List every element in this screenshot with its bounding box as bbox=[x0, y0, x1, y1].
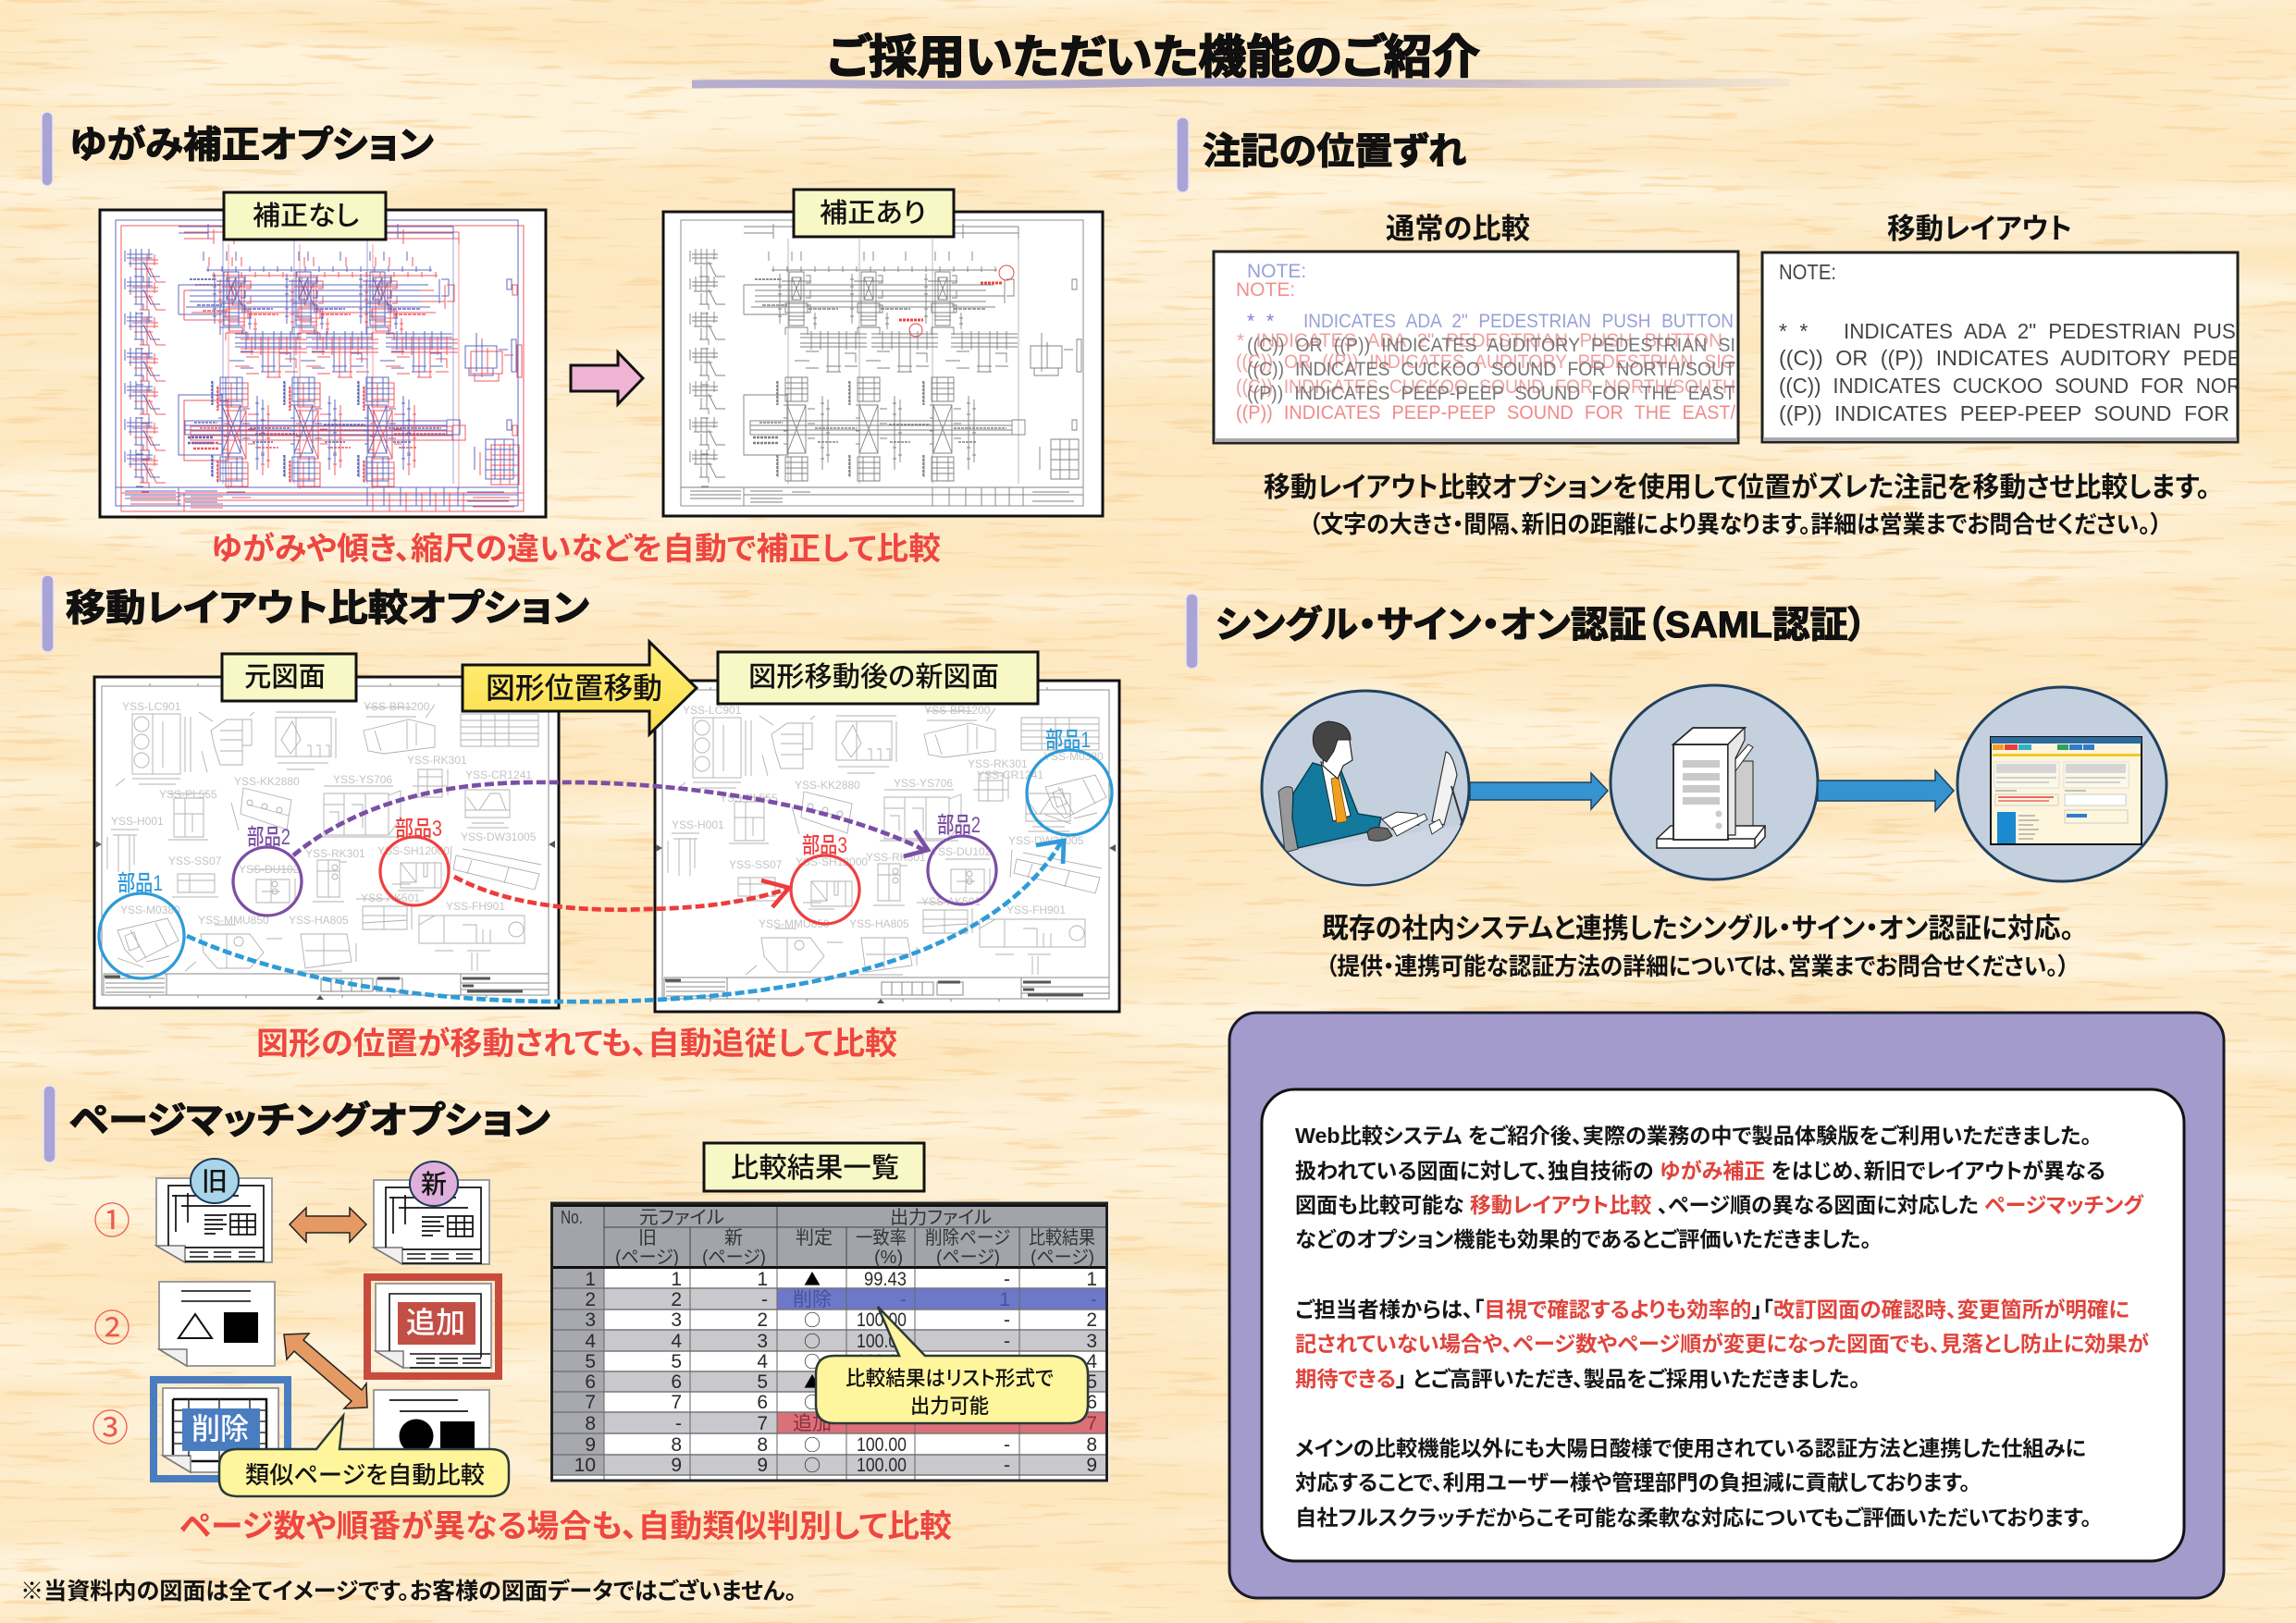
panel: moved layout notes: NOTE: bbox=[1779, 260, 1836, 284]
drawing: original: YSS-MMU850 bbox=[198, 914, 269, 927]
heading: distortion correction bbox=[42, 112, 434, 186]
drawing: original: YSS-SH12000 bbox=[377, 844, 450, 857]
arrow: part 1 movement bbox=[187, 841, 1064, 1002]
drawing: moved: YSS-H001 bbox=[672, 818, 724, 831]
drawing: moved: YSS-FH901 bbox=[1006, 904, 1066, 916]
icon: added page: 追加 bbox=[406, 1306, 465, 1339]
table rows: - bbox=[1091, 1289, 1097, 1310]
drawing: original bbox=[94, 677, 559, 1008]
drawing: original: YSS-BR1200 bbox=[364, 700, 430, 713]
table rows: 5 bbox=[757, 1371, 768, 1393]
heading: annotation offset: 注記の位置ずれ bbox=[1203, 131, 1466, 172]
icon: user at computer bbox=[1262, 691, 1469, 888]
drawing: original: YSS-DU102 bbox=[239, 863, 300, 876]
table rows: 4 bbox=[1086, 1351, 1097, 1372]
callout: list output: 比較結果はリスト形式で bbox=[846, 1367, 1054, 1390]
drawing: moved: YSS-DW31005 bbox=[1008, 834, 1084, 847]
drawing: moved: YSS-KK2880 bbox=[795, 779, 860, 792]
section: annotation offset bbox=[1177, 117, 2251, 538]
table rows: 1 bbox=[999, 1289, 1010, 1310]
table header: 新 bbox=[724, 1227, 743, 1248]
panel: normal comparison notes: ((P)) INDICATES PEEP-PEEP SOUND FOR THE EAST/ bbox=[1236, 402, 1735, 424]
drawing: original: YSS-HA805 bbox=[289, 914, 349, 927]
table rows: - bbox=[1004, 1309, 1010, 1331]
part 3 circles and labels: 部品3 bbox=[395, 817, 442, 842]
text: sso description: 既存の社内システムと連携したシングル・サイン・オン認証に対応。 bbox=[1322, 914, 2074, 944]
drawing: original: YSS-RK301 bbox=[305, 847, 365, 860]
table rows: 6 bbox=[585, 1371, 596, 1393]
table rows: 100.00 bbox=[857, 1351, 907, 1372]
table header: (%) bbox=[874, 1248, 903, 1268]
panel: moved layout notes: ((C)) INDICATES CUCKOO SOUND FOR NOR bbox=[1779, 374, 2241, 398]
table rows: 6 bbox=[671, 1371, 682, 1393]
label: original drawing: 元図面 bbox=[244, 662, 326, 693]
table rows: 3 bbox=[1086, 1331, 1097, 1352]
icon: new page bbox=[374, 1162, 489, 1264]
panel: moved layout notes: ((P)) INDICATES PEEP-PEEP SOUND FOR bbox=[1779, 401, 2229, 425]
panel: normal comparison notes bbox=[1214, 252, 1738, 443]
table rows: 7 bbox=[585, 1392, 596, 1413]
icon: new page: 新 bbox=[421, 1170, 447, 1199]
icon: similar page bbox=[374, 1390, 489, 1457]
table rows: 100.00 bbox=[857, 1455, 907, 1476]
table rows: - bbox=[1004, 1434, 1010, 1456]
table header: 出力ファイル bbox=[890, 1207, 992, 1228]
title: ご採用いただいた機能のご紹介 bbox=[827, 31, 1480, 83]
arrow: similar pages matched bbox=[284, 1334, 367, 1408]
table rows: - bbox=[761, 1289, 768, 1310]
panel: comment text box: などのオプション機能も効果的であるとご評価いただきました。 bbox=[1295, 1227, 1871, 1251]
label: without correction: 補正なし bbox=[253, 201, 359, 231]
panel: moved layout notes: INDICATES ADA 2" PEDESTRIAN PUSH bbox=[1844, 319, 2251, 343]
table rows: - bbox=[1004, 1331, 1010, 1352]
drawing: moved: YSS-M0380 bbox=[1043, 750, 1104, 763]
drawing: original: YSS-AK501 bbox=[361, 891, 420, 904]
table header: 比較結果 bbox=[1029, 1227, 1095, 1248]
table rows: 3 bbox=[585, 1309, 596, 1331]
icon: system screen bbox=[1957, 687, 2166, 881]
label: comparison result list: 比較結果一覧 bbox=[731, 1153, 899, 1184]
panel: normal comparison notes: INDICATES ADA 2" PEDESTRIAN PUSH BUTTON bbox=[1303, 311, 1734, 332]
panel: moved layout notes: * * bbox=[1779, 319, 1808, 343]
drawing: moved bbox=[655, 681, 1119, 1012]
drawing: moved: YSS-LC901 bbox=[683, 704, 742, 717]
table header: (ページ) bbox=[615, 1248, 679, 1268]
panel: normal comparison notes: ((C)) OR ((P)) INDICATES AUDITORY PEDESTRIAN SI bbox=[1247, 335, 1735, 356]
drawing: original: YSS-RK301 bbox=[407, 754, 467, 767]
table rows: 100.00 bbox=[857, 1331, 907, 1352]
table rows: 9 bbox=[585, 1434, 596, 1456]
table header: (ページ) bbox=[936, 1248, 1000, 1268]
table rows: 1 bbox=[757, 1269, 768, 1290]
drawing: moved: YSS-MMU850 bbox=[759, 917, 830, 930]
drawing: original: YSS-H001 bbox=[111, 815, 164, 828]
drawing: moved: YSS-HA805 bbox=[849, 917, 909, 930]
table rows: 4 bbox=[757, 1351, 768, 1372]
table rows: 100.00 bbox=[857, 1434, 907, 1456]
footnote: ※当資料内の図面は全てイメージです。お客様の図面データではございません。 bbox=[20, 1578, 796, 1605]
table rows: ○ bbox=[804, 1329, 821, 1353]
table rows: 7 bbox=[1086, 1413, 1097, 1434]
table rows: 2 bbox=[585, 1289, 596, 1310]
icon: authentication server bbox=[1611, 685, 1818, 879]
callout: similar page auto comparison: 類似ページを自動比較 bbox=[245, 1461, 485, 1489]
table rows: ○ bbox=[804, 1432, 821, 1457]
panel: comment text box: Web比較システム をご紹介後、実際の業務の中で製品体験版をご利用いただきました。 bbox=[1295, 1124, 2092, 1148]
table header: 旧 bbox=[638, 1228, 657, 1248]
label: without correction bbox=[224, 192, 386, 240]
heading: page matching bbox=[43, 1086, 550, 1162]
table header: 元ファイル bbox=[639, 1208, 724, 1228]
callout: list output bbox=[816, 1307, 1088, 1423]
table rows: 5 bbox=[671, 1351, 682, 1372]
heading: annotation offset bbox=[1177, 117, 1466, 192]
part 2 circles and labels bbox=[233, 813, 996, 916]
table rows: 1 bbox=[671, 1269, 682, 1290]
step numbers: ③ bbox=[92, 1408, 129, 1449]
drawing: original: YSS-M0380 bbox=[120, 904, 180, 916]
table rows: 8 bbox=[757, 1434, 768, 1456]
panel: comment text box: ご担当者様からは、「目視で確認するよりも効率的」「改訂図面の確認時、変更箇所が明確に bbox=[1295, 1297, 2129, 1322]
drawing: original: YSS-LC901 bbox=[122, 700, 181, 713]
table rows: - bbox=[900, 1289, 907, 1310]
section: page matching bbox=[43, 1086, 1109, 1544]
arrow: part 2 movement bbox=[293, 782, 928, 856]
heading: moved layout: 移動レイアウト比較オプション bbox=[66, 588, 589, 629]
part 1 circles and labels: 部品1 bbox=[117, 871, 163, 896]
icon: page with shapes bbox=[159, 1282, 275, 1366]
drawing: original: YSS-CR1241 bbox=[465, 768, 532, 781]
panel: comment text box bbox=[1262, 1089, 2184, 1561]
panel: normal comparison notes: * INDICATES ADA 2" PEDESTRIAN PUSH BUTTON bbox=[1237, 330, 1722, 351]
table rows: ○ bbox=[804, 1390, 821, 1414]
panel: comment text box: 図面も比較可能な 移動レイアウト比較 、ページ順の異なる図面に対応した ページマッチング bbox=[1295, 1193, 2144, 1217]
table header: No. bbox=[561, 1208, 583, 1228]
arrow: old and new pages match bbox=[290, 1208, 366, 1242]
part 3 circles and labels: 部品3 bbox=[802, 833, 847, 858]
table rows: - bbox=[1004, 1351, 1010, 1372]
label: with correction bbox=[794, 190, 954, 237]
table rows: 9 bbox=[1086, 1455, 1097, 1476]
label: with correction: 補正あり bbox=[820, 198, 926, 228]
drawing: moved: YSS-PL555 bbox=[720, 792, 778, 805]
panel: moved layout notes bbox=[1762, 252, 2251, 442]
part 2 circles and labels: 部品2 bbox=[247, 825, 290, 850]
table header bbox=[551, 1203, 1106, 1269]
table rows bbox=[552, 1267, 1105, 1480]
drawing: moved: YSS-RK301 bbox=[866, 851, 926, 864]
table header: 判定 bbox=[796, 1227, 833, 1248]
panel: customer comments bbox=[1229, 1013, 2224, 1598]
table header: 削除ページ bbox=[925, 1227, 1010, 1248]
drawing: original: YSS-SS07 bbox=[168, 855, 222, 867]
text: annotation description: （文字の大きさ・間隔、新旧の距離により異なります。詳細は営業までお問合せください。） bbox=[1309, 510, 2162, 538]
table rows: 3 bbox=[671, 1309, 682, 1331]
caption: moved layout: 図形の位置が移動されても、自動追従して比較 bbox=[256, 1026, 897, 1062]
table rows: ▲ bbox=[804, 1370, 821, 1394]
drawing: original: YSS-FH901 bbox=[446, 900, 505, 913]
label: new drawing: 図形移動後の新図面 bbox=[748, 662, 999, 693]
icon: old page bbox=[156, 1159, 272, 1262]
table header: (ページ) bbox=[702, 1248, 766, 1268]
table rows: - bbox=[675, 1413, 682, 1434]
panel: normal comparison notes: ((C)) INDICATES CUCKOO SOUND FOR NORTH/SOUTH bbox=[1236, 376, 1735, 398]
drawing: moved: YSS-AK501 bbox=[921, 895, 981, 908]
panel: normal comparison notes: ((C)) OR ((P)) INDICATES AUDITORY PEDESTRIAN SIG bbox=[1236, 351, 1735, 373]
panel: normal comparison notes: NOTE: bbox=[1247, 261, 1306, 282]
panel: comment text box: 対応することで、利用ユーザー様や管理部門の負担減に貢献しております。 bbox=[1295, 1470, 1970, 1494]
table rows: ○ bbox=[804, 1349, 821, 1373]
table rows: 2 bbox=[1086, 1309, 1097, 1331]
drawing: without correction bbox=[100, 210, 546, 517]
drawing: moved: YSS-YS706 bbox=[894, 777, 953, 790]
table rows: ○ bbox=[804, 1308, 821, 1332]
table rows: 99.43 bbox=[864, 1269, 907, 1290]
drawing: original: YSS-YS706 bbox=[333, 773, 392, 786]
label: moved layout: 移動レイアウト bbox=[1887, 213, 2072, 245]
panel: comment text box: 自社フルスクラッチだからこそ可能な柔軟な対応についてもご評価いただいております。 bbox=[1295, 1506, 2092, 1530]
panel: normal comparison notes: ((P)) INDICATES PEEP-PEEP SOUND FOR THE EAST bbox=[1247, 383, 1735, 404]
text: sso description: （提供・連携可能な認証方法の詳細については、営業までお問合せください。） bbox=[1326, 953, 2069, 980]
label: normal comparison: 通常の比較 bbox=[1386, 213, 1530, 245]
panel: moved layout notes: ((C)) OR ((P)) INDICATES AUDITORY PEDE bbox=[1779, 346, 2241, 370]
panel: comment text box: メインの比較機能以外にも大陽日酸様で使用されている認証方法と連携した仕組みに bbox=[1295, 1436, 2086, 1460]
table rows: 1 bbox=[585, 1269, 596, 1290]
part 1 circles and labels: 部品1 bbox=[1045, 728, 1091, 753]
table rows: 1 bbox=[1086, 1269, 1097, 1290]
arrow: part 3 movement bbox=[454, 877, 789, 910]
arrow: correction result bbox=[571, 352, 643, 404]
drawing: with correction bbox=[663, 212, 1103, 516]
table rows: - bbox=[1004, 1269, 1010, 1290]
table rows: 6 bbox=[1086, 1392, 1097, 1413]
step numbers bbox=[92, 1201, 130, 1449]
section: single sign-on bbox=[1186, 594, 2166, 980]
panel: comment text box: 記されていない場合や、ページ数やページ順が変更になった図面でも、見落とし防止に効果が bbox=[1295, 1332, 2149, 1356]
callout: list output: 出力可能 bbox=[910, 1395, 989, 1418]
step numbers: ① bbox=[93, 1201, 130, 1242]
table rows: 追加 bbox=[793, 1413, 832, 1434]
table rows: 9 bbox=[671, 1455, 682, 1476]
icon: deleted page bbox=[154, 1380, 288, 1479]
table rows: 8 bbox=[585, 1413, 596, 1434]
drawing: moved: YSS-CR1241 bbox=[977, 768, 1043, 781]
table rows: 4 bbox=[585, 1331, 596, 1352]
heading: moved layout bbox=[42, 575, 589, 652]
heading: single sign-on: シングル・サイン・オン認証（SAML認証） bbox=[1216, 605, 1867, 646]
table rows: 5 bbox=[585, 1351, 596, 1372]
table rows: 削除 bbox=[793, 1289, 832, 1310]
table rows: ▲ bbox=[804, 1267, 821, 1291]
heading: distortion correction: ゆがみ補正オプション bbox=[69, 125, 434, 166]
text: sso description bbox=[1322, 914, 2074, 980]
table rows: 100.00 bbox=[857, 1309, 907, 1331]
text: annotation description bbox=[1264, 472, 2210, 538]
panel: normal comparison notes: ((C)) INDICATES CUCKOO SOUND FOR NORTH/SOUT bbox=[1247, 359, 1735, 380]
step numbers: ② bbox=[93, 1309, 130, 1349]
table rows: 3 bbox=[757, 1331, 768, 1352]
table rows: 6 bbox=[757, 1392, 768, 1413]
table rows: 4 bbox=[671, 1331, 682, 1352]
icon: old page: 旧 bbox=[202, 1167, 228, 1196]
table rows: 7 bbox=[757, 1413, 768, 1434]
drawing: moved: YSS-DU102 bbox=[931, 845, 992, 858]
caption: page matching: ページ数や順番が異なる場合も、自動類似判別して比較 bbox=[179, 1508, 952, 1544]
panel: comment text box: 扱われている図面に対して、独自技術の ゆがみ補正 をはじめ、新旧でレイアウトが異なる bbox=[1295, 1159, 2105, 1183]
panel: comment text box: 期待できる」 とご高評いただき、製品をご採用いただきました。 bbox=[1295, 1367, 1860, 1391]
icon: deleted page: 削除 bbox=[191, 1412, 249, 1445]
table rows: 8 bbox=[671, 1434, 682, 1456]
drawing: original: YSS-KK2880 bbox=[234, 775, 300, 788]
drawing: original: YSS-DW31005 bbox=[461, 830, 537, 843]
table rows: 2 bbox=[671, 1289, 682, 1310]
heading: single sign-on bbox=[1186, 594, 1867, 669]
part 3 circles and labels bbox=[380, 817, 859, 924]
text: annotation description: 移動レイアウト比較オプションを使用して位置がズレた注記を移動させ比較します。 bbox=[1264, 472, 2210, 503]
label: new drawing bbox=[718, 652, 1038, 704]
section: moved layout comparison bbox=[42, 575, 1119, 1062]
table rows: ○ bbox=[804, 1453, 821, 1477]
drawing: moved: YSS-SH12000 bbox=[796, 855, 868, 868]
drawing: moved: YSS-SS07 bbox=[729, 858, 783, 871]
part 1 circles and labels bbox=[99, 728, 1112, 978]
caption: distortion correction: ゆがみや傾き、縮尺の違いなどを自動で補正して比較 bbox=[211, 531, 941, 567]
panel: normal comparison notes: * * bbox=[1247, 311, 1274, 332]
arrow: position moved bbox=[463, 642, 697, 734]
panel: normal comparison notes: NOTE: bbox=[1236, 279, 1295, 301]
drawing: moved: YSS-BR1200 bbox=[924, 704, 991, 717]
table rows: - bbox=[1004, 1455, 1010, 1476]
arrow: position moved: 図形位置移動 bbox=[486, 671, 662, 705]
icon: added page bbox=[367, 1277, 499, 1376]
section: distortion correction bbox=[42, 112, 1103, 567]
heading: page matching: ページマッチングオプション bbox=[69, 1100, 550, 1141]
callout: similar page auto comparison bbox=[219, 1416, 509, 1496]
label: original drawing bbox=[222, 654, 356, 701]
drawing: original: YSS-PL555 bbox=[159, 788, 217, 801]
part 2 circles and labels: 部品2 bbox=[937, 813, 981, 838]
arrow: user to authentication server bbox=[1470, 773, 1608, 809]
table header: (ページ) bbox=[1031, 1248, 1094, 1268]
arrow: server to system bbox=[1818, 770, 1954, 811]
table header: 一致率 bbox=[856, 1227, 907, 1248]
table rows: 7 bbox=[671, 1392, 682, 1413]
drawing: moved: YSS-RK301 bbox=[968, 757, 1028, 770]
table rows: 5 bbox=[1086, 1371, 1097, 1393]
table: comparison results bbox=[550, 1201, 1109, 1482]
label: comparison result list bbox=[704, 1143, 924, 1191]
table rows: 8 bbox=[1086, 1434, 1097, 1456]
table rows: 2 bbox=[757, 1309, 768, 1331]
table rows: 9 bbox=[757, 1455, 768, 1476]
table rows: 10 bbox=[574, 1455, 596, 1476]
